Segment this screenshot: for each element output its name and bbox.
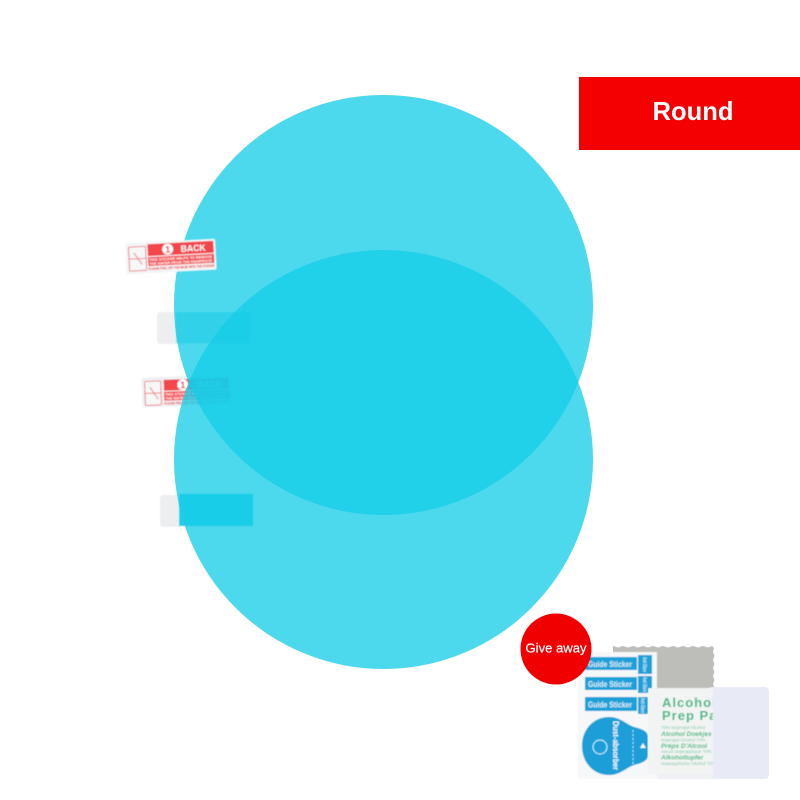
lower sticker label: BACK [197,379,222,390]
lower sticker label: 1 [180,380,186,391]
upper round film [174,95,593,515]
guide sticker sheet: Guide Sticker [588,700,632,710]
alcohol prep pad: Alcool Isopropylique 70% [661,749,712,754]
lower pull tab [160,494,253,527]
alcohol prep pad: Alcohol Doekjes [660,731,712,738]
badge: Give away [520,614,592,684]
upper sticker label: 1 [165,244,171,256]
upper sticker label [125,239,217,274]
upper sticker label: BACK [180,243,206,254]
accessory kit [578,646,769,779]
upper pull tab [157,312,250,344]
guide sticker sheet: Anti Glare [639,698,645,713]
lower sticker label: THE WATER FROM THE RAINPROOF [165,395,228,401]
upper sticker label: THE WATER FROM THE RAINPROOF [149,259,213,266]
guide sticker sheet: Anti Glare [641,657,647,672]
alcohol prep pad: Préps D'Alcool [661,743,707,750]
lower round film [174,250,593,669]
guide sticker sheet: Guide Sticker [588,680,632,689]
banner: Round: Round [652,96,734,126]
badge: Give away: Give away [526,642,587,656]
alcohol prep pad: Alcohol [662,695,717,710]
guide sticker sheet: Anti Glare [641,677,647,692]
alcohol prep pad [647,687,714,779]
alcohol prep pad: Isopropyl Alcohol 70% [661,738,705,742]
cleaning cloth [613,646,714,700]
guide sticker sheet: Guide Sticker [588,660,632,669]
upper sticker label: THIS STICKER HELPS TO REMOVE [149,255,213,262]
lower sticker label: THIS STICKER HELPS TO REMOVE [165,391,228,397]
plastic card [708,687,769,779]
banner: Round [579,77,800,150]
alcohol prep pad: 70% Isopropyl Alcohol [661,725,705,730]
alcohol prep pad: Prep Pad [662,708,726,723]
alcohol prep pad: Isopropylische Alkohol 70% [661,761,716,766]
upper sticker label: PLEASE PEEL OFF THE MASK WITH THE STICKER [149,264,215,271]
alcohol prep pad: Alkoholtupfer [660,754,704,762]
guide sticker sheet: Dust-absorber [611,721,621,771]
lower sticker label: PLEASE PEEL OFF THE MASK WITH THE STICKER [164,400,230,406]
guide sticker sheet [578,652,657,779]
dust absorber [582,717,648,775]
lower sticker label [142,374,232,408]
